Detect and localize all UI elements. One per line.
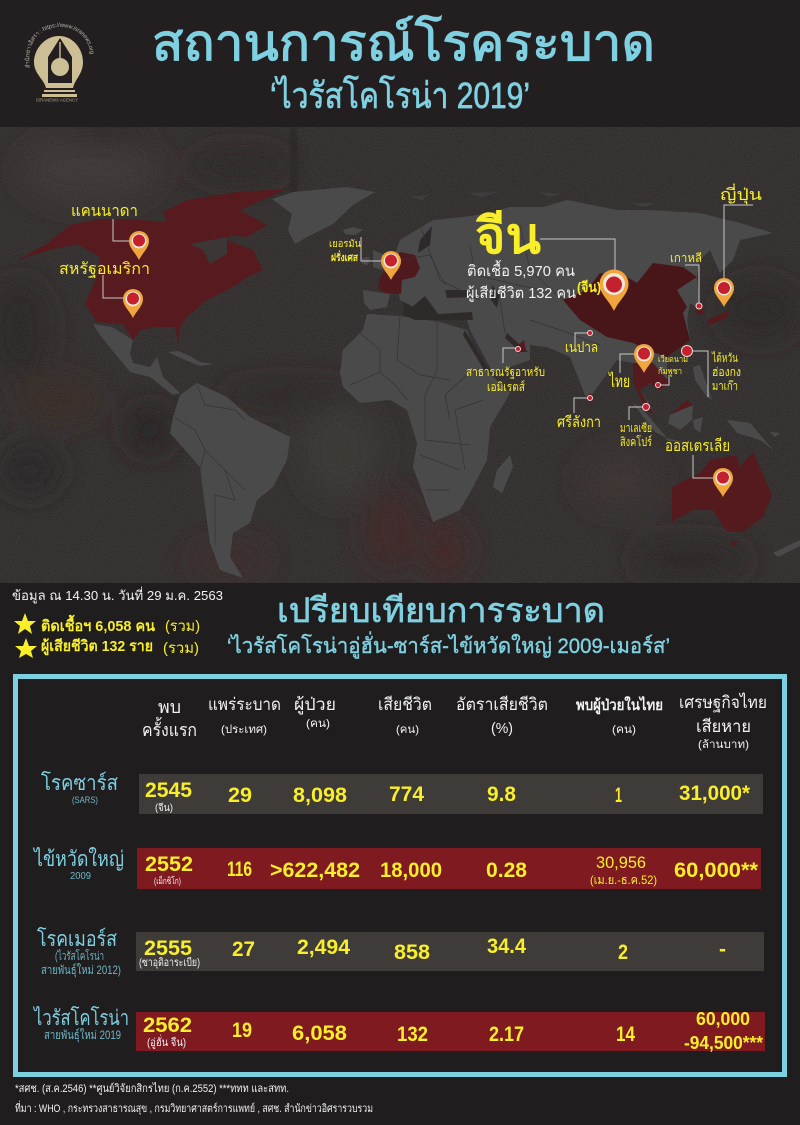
pin: Canada [129,231,149,260]
row: novel coronavirus 2019 [32,1006,765,1053]
logo [24,22,94,102]
map country labels: มาเลเซีย [620,421,652,435]
row: MERS: 27 [232,938,255,961]
map country labels: สิงคโปร์ [620,435,652,449]
table column headers [142,692,767,751]
row: H1N1 influenza 2009: 2552 [145,853,193,876]
land: Australia in red [672,452,772,547]
row: novel coronavirus 2019: 6,058 [292,1022,347,1045]
row: MERS [37,927,764,978]
row: novel coronavirus 2019: ไวรัสโคโรน่า [32,1006,129,1030]
row: SARS: 1 [615,784,622,807]
map country labels [59,183,762,455]
row: MERS: 2 [618,941,628,964]
row: H1N1 influenza 2009: (เม็กซิโก) [154,874,181,886]
row: SARS: 31,000* [679,782,751,805]
seas: Mediterranean, Black Sea and gulfs [403,226,528,372]
row: MERS: (ซาอุดิอาระเบีย) [139,956,200,969]
row: MERS: 858 [394,941,430,964]
land: Spain and Britain [362,250,390,310]
row: MERS: (ไวรัสโคโรน่า [55,949,104,963]
map country labels: ฝรั่งเศส [331,250,359,264]
pin: Australia [713,468,733,497]
row: SARS: 2545 [145,779,192,802]
map country labels: ญี่ปุ่น [720,183,762,205]
land: North America in red [17,189,287,344]
land: Mexico, Central America and Caribbean [93,324,213,395]
map country labels: ออสเตรเลีย [665,437,730,455]
row: SARS: โรคซาร์ส [41,771,118,795]
map country labels: กัมพูชา [658,366,682,377]
map country labels: ไทย [608,371,630,391]
China case counts: ติดเชื้อ 5,970 คน [467,260,575,280]
totals with stars: ติดเชื้อฯ 6,058 คน [41,614,156,635]
row: MERS: โรคเมอร์ส [37,927,117,951]
title: สถานการณ์โรคระบาด [152,15,655,71]
table column headers: (คน) [396,724,419,736]
row: novel coronavirus 2019: 14 [616,1023,635,1046]
pin: Thailand [634,344,654,373]
row: H1N1 influenza 2009 [32,847,761,889]
row: H1N1 influenza 2009: 2009 [70,871,91,882]
land: Korea, Japan and Southeast Asia red [518,309,730,413]
row: H1N1 influenza 2009: 60,000** [674,859,759,882]
map country labels: ไต้หวัน [711,351,738,365]
table column headers: พบ [158,697,181,717]
map country labels: เนปาล [565,339,598,355]
row: novel coronavirus 2019: 132 [397,1023,428,1046]
pin: China [600,270,628,311]
row: SARS: 8,098 [293,784,347,807]
table frame [16,676,784,1074]
row: MERS: สายพันธุ์ใหม่ 2012) [41,963,121,978]
comparison subheading: ‘ไวรัสโคโรน่าอู่ฮั่น-ซาร์ส-ไข้หวัดใหญ่ 2009-เมอร์ส’ [227,631,670,659]
land: Greenland and Iceland [272,187,375,244]
row: novel coronavirus 2019: 2.17 [489,1023,524,1046]
totals with stars [14,613,200,658]
table column headers: แพร่ระบาด [208,695,281,714]
table column headers: เศรษฐกิจไทย [679,692,767,713]
row: MERS: 34.4 [487,935,526,958]
table column headers: เสียชีวิต [378,695,432,714]
land: China in red [563,263,697,357]
map country labels: เวียดนาม [658,354,688,364]
table column headers: อัตราเสียชีวิต [456,695,548,714]
table column headers: ผู้ป่วย [294,695,336,715]
pin: Germany and France [381,251,401,280]
land: Africa [340,314,510,522]
map country labels: เอมิเรตส์ [487,380,526,394]
table column headers: เสียหาย [696,717,751,736]
China case counts: ผู้เสียชีวิต 132 คน [466,285,576,302]
row: MERS: 2555 [144,937,192,960]
footnote: *สศช. (ส.ค.2546) **ศูนย์วิจัยกสิกรไทย (ก.ค.2552) ***ททท และสทท. [15,1082,289,1095]
subtitle: ‘ไวรัสโคโรน่า 2019’ [270,75,530,116]
map country labels: ศรีลังกา [557,414,601,431]
row: novel coronavirus 2019: 19 [232,1019,252,1042]
land: Borneo north in red [670,400,693,415]
table column headers: (ประเทศ) [221,724,267,736]
pin: Japan [714,278,734,307]
map country labels: ฮ่องกง [712,365,741,379]
map country labels: สหรัฐอเมริกา [59,261,150,278]
land: Arctic islands of Russia [410,192,655,207]
panel: map background [0,125,800,583]
map leader lines [103,205,753,478]
row: SARS: (จีน) [155,802,173,814]
table column headers: (%) [491,720,513,737]
row: novel coronavirus 2019: 2562 [143,1014,192,1037]
land: Eurasia [392,200,773,413]
data timestamp: ข้อมูล ณ 14.30 น. วันที่ 29 ม.ค. 2563 [12,587,223,604]
sea: Hudson Bay [190,237,227,264]
land: South America [170,383,290,578]
China case counts [466,260,576,302]
table column headers: พบผู้ป่วยในไทย [576,695,663,715]
map country labels: แคนนาดา [71,203,138,220]
row: H1N1 influenza 2009: 18,000 [380,859,442,882]
totals with stars: ผู้เสียชีวิต 132 ราย [41,637,153,656]
comparison heading: เปรียบเทียบการระบาด [277,592,605,630]
row: SARS: 774 [389,783,424,806]
sources: ที่มา : WHO , กระทรวงสาธารณสุข , กรมวิทยาศาสตร์การแพทย์ , สศช. สำนักข่าวอิศรารวบรวม [15,1100,373,1115]
land: islands of Southeast Asia and Oceania [632,365,800,557]
row: H1N1 influenza 2009: 30,956 [596,853,646,872]
row: H1N1 influenza 2009: (เม.ย.-ธ.ค.52) [590,873,657,887]
row: H1N1 influenza 2009: ไข้หวัดใหญ่ [32,847,124,871]
row: MERS: - [719,938,726,961]
header band [0,0,800,127]
logo: ISRANEWS AGENCY [36,98,78,102]
row: SARS: 29 [228,784,252,807]
map country labels: เกาหลี [670,251,702,265]
row: novel coronavirus 2019: สายพันธุ์ใหม่ 2019 [44,1028,121,1043]
map country labels: เยอรมัน [329,239,361,250]
logo: สำนักข่าวอิศรา : https://www.isranews.org [24,22,94,68]
land: Madagascar [493,455,513,493]
map country labels: สาธารณรัฐอาหรับ [466,365,545,379]
row: SARS: 9.8 [487,783,516,806]
row: H1N1 influenza 2009: 116 [227,858,252,881]
row: SARS: (SARS) [72,795,98,805]
row: SARS [41,771,763,814]
row: H1N1 influenza 2009: 0.28 [486,859,527,882]
row: novel coronavirus 2019: (อู่ฮั่น จีน) [147,1034,186,1049]
row: H1N1 influenza 2009: >622,482 [270,859,360,882]
row: MERS: 2,494 [297,936,350,959]
table column headers: (คน) [612,724,636,736]
map country labels: มาเก๊า [712,379,738,393]
pin: USA [123,289,143,318]
panel: world map [17,187,800,578]
table column headers: ครั้งแรก [142,717,197,740]
map country labels: (จีน) [577,279,601,295]
row: novel coronavirus 2019: -94,500*** [684,1033,763,1053]
totals with stars: (รวม) [163,640,199,657]
row: novel coronavirus 2019: 60,000 [696,1009,750,1029]
land: France and Germany in red [378,252,420,294]
map country labels: จีน [475,208,541,264]
lower section background [0,583,800,1125]
small location dots [516,303,702,410]
table column headers: (คน) [306,718,330,730]
totals with stars: (รวม) [165,618,200,635]
table column headers: (ล้านบาท) [698,739,749,751]
